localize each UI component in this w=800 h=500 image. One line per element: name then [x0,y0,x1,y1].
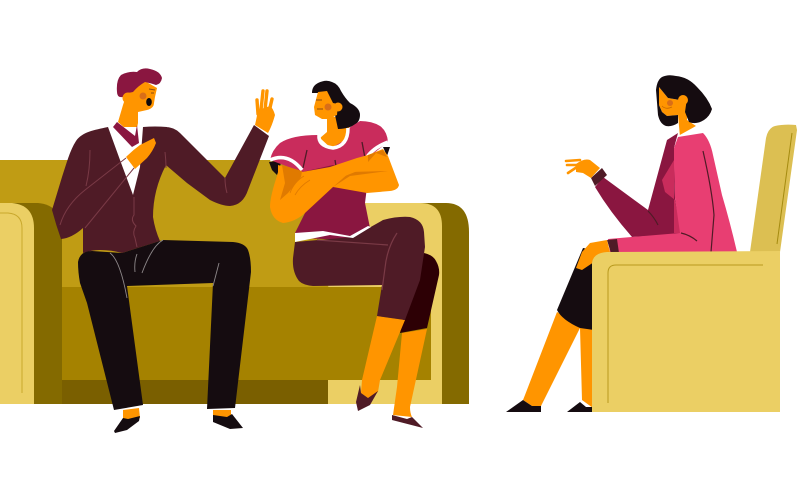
therapist cheek [667,100,673,106]
man cheek [140,92,146,100]
therapist raised hand [566,160,600,178]
woman trousers [293,217,425,320]
therapist resting hand [576,240,610,270]
man sweater lines [60,150,227,247]
therapist dark top and sleeve [595,133,681,237]
man sweater body [52,126,167,253]
therapist skirt [557,248,594,330]
woman hair [312,81,360,129]
woman on sofa [269,81,439,428]
man socks [123,408,231,420]
sofa back [0,160,330,290]
woman back shoe [392,415,423,428]
therapist right shoe [567,402,593,412]
therapist legs [523,312,593,408]
therapist cuff lower [607,239,619,253]
sofa left arm [0,203,62,404]
woman hand lines [290,176,310,195]
woman waistband [295,226,371,242]
man left shoe [114,416,140,433]
man hair [117,68,162,97]
woman front shoe [356,385,378,411]
sofa right arm [328,203,469,404]
armchair front [592,251,780,412]
woman upper shirt [270,121,388,172]
therapist blouse [662,160,681,233]
woman trouser lines [317,233,397,290]
therapist cuff upper [591,168,607,186]
therapist chair back [750,125,797,252]
man raised hand [255,91,275,133]
therapist neck and face [659,87,696,137]
man [52,68,275,433]
woman face [314,91,338,119]
woman right arm shadow [333,150,388,187]
man neck and face [118,80,157,137]
man trousers [78,240,251,410]
sofa seat [61,287,431,380]
woman ear [334,102,342,112]
man eye [149,89,155,93]
woman left arm shadow [280,165,302,200]
woman back leg [400,253,439,333]
man right shoe [213,414,243,429]
woman orange back leg [393,329,427,417]
woman sleeves inner [269,147,390,175]
armchair line [608,265,763,403]
man trouser lines [110,240,219,298]
woman cheek [324,104,332,110]
woman shirt folds [303,142,365,168]
therapist left shoe [506,400,541,412]
woman left arm [270,158,365,223]
therapist jacket lines [648,151,714,252]
therapist ear [678,95,688,105]
therapist collar [678,126,703,139]
woman right arm [333,149,399,193]
woman eye [316,100,323,109]
therapist smile [662,106,672,108]
woman neck [320,115,349,150]
man shirt [107,127,143,196]
therapist hair [656,75,712,126]
sofa [0,160,469,404]
man chest hand [126,138,156,169]
woman neck ring [319,128,348,148]
therapist [506,75,797,412]
man mouth [146,98,152,106]
woman sleeve bands [270,142,388,170]
sofa seat front [61,380,328,404]
therapist chair back line [777,133,792,244]
man raised arm [150,125,269,206]
therapist pink jacket [608,133,737,254]
woman orange front leg [361,316,405,398]
woman lower shirt [295,160,370,240]
man ear [122,92,134,104]
man collar [113,122,139,147]
